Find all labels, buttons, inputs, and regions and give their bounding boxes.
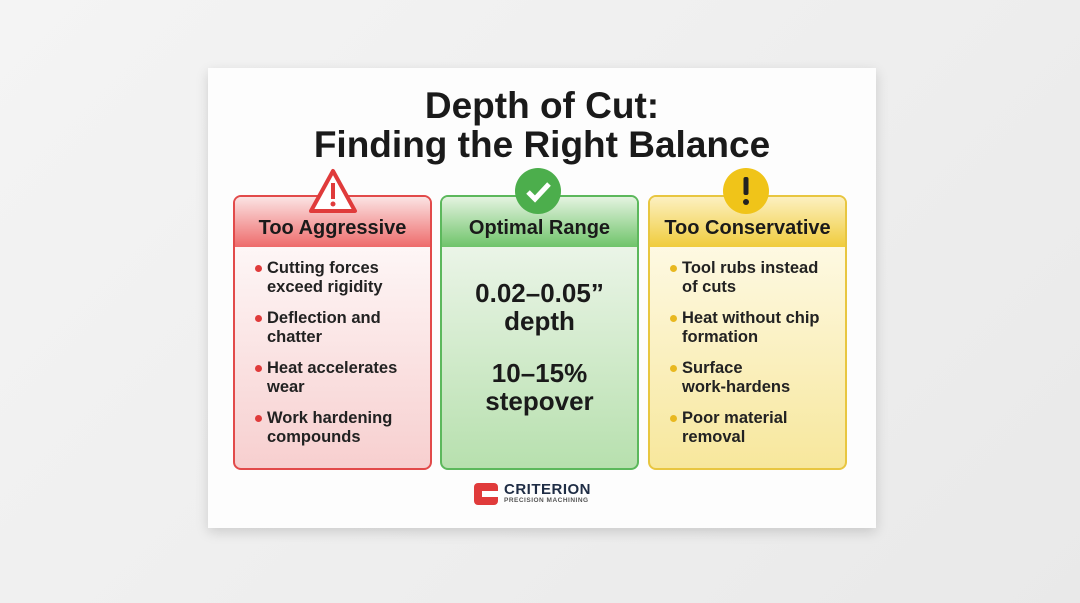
list: conservative: Heat without chip [682, 309, 820, 327]
list: conservative: Tool rubs instead [682, 259, 818, 277]
list: aggressive: Cutting forces [267, 259, 379, 277]
title: Depth of Cut: [425, 85, 659, 126]
list: aggressive: chatter [267, 328, 322, 346]
title [314, 85, 770, 165]
logo mark [474, 483, 498, 505]
heading: optimal [442, 197, 637, 247]
panel: too aggressive [233, 195, 432, 470]
values: stepover [485, 386, 594, 416]
heading: too aggressive [235, 197, 430, 247]
list: aggressive: Work hardening [267, 409, 392, 427]
values [475, 278, 604, 416]
icon: warning triangle [309, 168, 358, 213]
values: depth [504, 306, 575, 336]
heading: conservative: Too Conservative [664, 217, 831, 239]
list: aggressive: Deflection and [267, 309, 381, 327]
list: aggressive: wear [267, 378, 305, 396]
list: aggressive [255, 259, 397, 446]
panel: too conservative [648, 195, 847, 470]
list: conservative: removal [682, 428, 745, 446]
list: conservative: Surface [682, 359, 743, 377]
logo [474, 481, 591, 505]
list: conservative: Poor material [682, 409, 787, 427]
list: aggressive: compounds [267, 428, 360, 446]
heading: conservative [650, 197, 845, 247]
logo: PRECISION MACHINING [504, 497, 589, 504]
panel: optimal [440, 195, 639, 470]
sheet [208, 68, 876, 528]
list: aggressive: Heat accelerates [267, 359, 397, 377]
list: conservative [670, 259, 820, 446]
heading: optimal: Optimal Range [469, 217, 610, 239]
title: Finding the Right Balance [314, 124, 770, 165]
list: aggressive: exceed rigidity [267, 278, 383, 296]
icon: check [515, 168, 561, 214]
list: conservative: work-hardens [682, 378, 790, 396]
values: 10–15% [492, 358, 587, 388]
list: conservative: formation [682, 328, 758, 346]
logo text: CRITERION [504, 481, 591, 498]
heading: too aggressive: Too Aggressive [259, 217, 406, 239]
values: 0.02–0.05” [475, 278, 604, 308]
icon: exclamation [723, 168, 769, 214]
list: conservative: of cuts [682, 278, 736, 296]
